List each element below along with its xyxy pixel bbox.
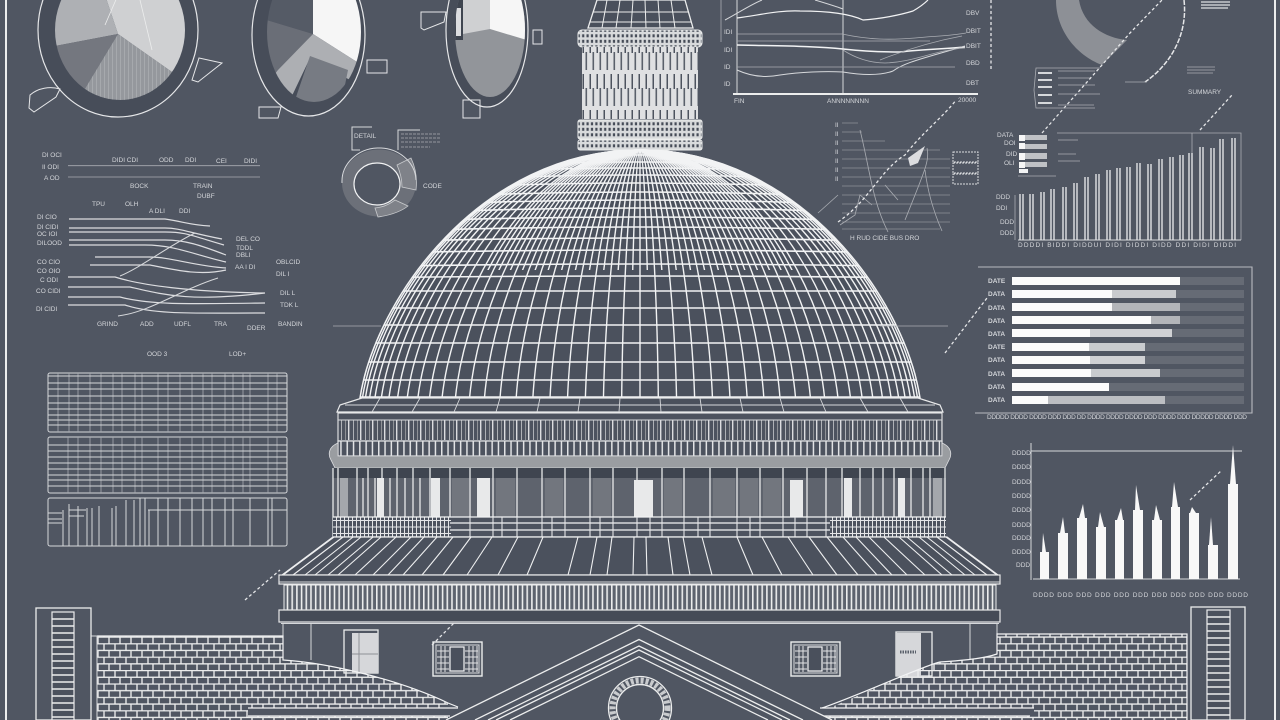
bar chart legend: DID	[1006, 151, 1018, 158]
wall verticals	[283, 623, 997, 660]
y-axis labels: DDDD	[1012, 450, 1031, 457]
small chart labels: H RUD CIDE BUS DRO	[850, 235, 919, 242]
dome side leader lines	[333, 325, 948, 327]
axis labels: DDI	[179, 208, 190, 215]
lower cornice	[279, 610, 1000, 624]
pie one callout left	[29, 88, 60, 112]
table two	[48, 437, 287, 493]
panel: pie chart three	[421, 0, 542, 118]
pie one outer ring	[38, 0, 198, 117]
dotted trend	[1190, 470, 1222, 500]
y-axis labels	[1012, 450, 1031, 569]
bar chart legend: DOI	[1004, 140, 1016, 147]
white segments	[1012, 277, 1180, 404]
pie three callout top	[421, 12, 446, 30]
round window	[608, 676, 672, 720]
line chart labels	[724, 10, 981, 105]
line chart labels: DBIT	[966, 43, 981, 50]
ring highlighted segments	[375, 158, 416, 217]
y-axis labels: DDDD	[1012, 464, 1031, 471]
left small window	[433, 642, 482, 676]
bar chart labels: DDD	[1000, 230, 1014, 237]
small chart labels: II	[835, 140, 839, 147]
flow labels: DIL L	[280, 290, 296, 297]
flow labels: CO CIDI	[36, 288, 61, 295]
small chart labels: II	[835, 122, 839, 129]
bar chart legend: OLI	[1004, 160, 1015, 167]
pie two outer ring	[252, 0, 365, 116]
dotted connector	[1200, 95, 1232, 130]
panel: vertical bars chart	[996, 132, 1241, 249]
x-axis labels: DDDD DDD DDD DDD DDD DDD DDD DDD DDD DDD DDDD	[1033, 592, 1248, 599]
flow labels: CO OIO	[37, 268, 60, 275]
row labels: DATA	[988, 305, 1005, 312]
flow labels: TRA	[214, 321, 228, 328]
pie two label box	[259, 107, 281, 118]
flow labels: DI CIDI	[36, 306, 58, 313]
bar chart labels	[996, 194, 1236, 249]
dotted leader	[945, 298, 987, 353]
panel: top centre line chart	[721, 0, 991, 105]
bars and spikes	[1040, 445, 1238, 579]
small chart gridlines	[842, 123, 950, 229]
panel: left line diagram	[36, 152, 303, 332]
row labels: DATA	[988, 384, 1005, 391]
row labels: DATA	[988, 318, 1005, 325]
flow labels: OBLCID	[276, 259, 301, 266]
upper ledge	[337, 398, 943, 412]
line chart labels: ID	[724, 81, 731, 88]
curved dashed arc	[1145, 0, 1185, 82]
legend list box	[1034, 68, 1100, 108]
small chart labels: II	[835, 167, 839, 174]
panel: left tables	[48, 351, 287, 546]
bar chart labels: DDDDI BIDDI DIDDUI DIDI DIDDI DIDD DDI DIDI DIDDI	[1018, 242, 1236, 249]
small chart curves	[840, 130, 942, 232]
small chart labels: II	[835, 158, 839, 165]
small chart labels: II	[835, 131, 839, 138]
upper colonnade	[338, 413, 942, 441]
flow labels: CO CIO	[37, 259, 60, 266]
flow labels: DDER	[247, 325, 266, 332]
axis labels: OLH	[125, 201, 139, 208]
side panels	[452, 478, 781, 517]
bar chart labels: DDD	[996, 194, 1010, 201]
flow labels: C ODI	[40, 277, 58, 284]
tower lantern cap	[588, 0, 693, 28]
line chart labels: DBD	[966, 60, 980, 67]
pie three outer ring	[446, 0, 528, 107]
columns	[333, 468, 945, 537]
axis labels	[42, 152, 257, 215]
left brick roof	[91, 636, 458, 720]
bar chart legend	[997, 132, 1080, 176]
row labels: DATA	[988, 397, 1005, 404]
small chart labels: II	[835, 149, 839, 156]
grey segments	[1012, 290, 1180, 404]
flow labels: BANDIN	[278, 321, 303, 328]
line chart labels: DBV	[966, 10, 980, 17]
cornice	[279, 575, 1000, 584]
pie one slices	[55, 0, 185, 100]
bars	[1020, 138, 1235, 240]
flow labels	[36, 214, 303, 332]
dashed diagonal	[838, 100, 956, 222]
line chart labels: IDI	[724, 29, 732, 36]
table footnote: DDDDD DDDD DDDD DDD DDD DD DDDD DDDD DDDD DDD DDDD DDD DDDDD DDDD DDD	[987, 414, 1247, 421]
flow labels: AA I DI	[235, 264, 255, 271]
ring body	[342, 150, 416, 216]
right brick roof	[820, 634, 1187, 720]
donut arc	[1056, 0, 1127, 65]
row labels	[988, 278, 1006, 404]
row labels: DATE	[988, 278, 1006, 285]
pie three callout right	[533, 30, 542, 44]
flow labels: UDFL	[174, 321, 191, 328]
row labels: DATA	[988, 357, 1005, 364]
table headers: LOD+	[229, 351, 246, 358]
panel: top right donut	[1034, 0, 1232, 133]
small chart side boxes	[953, 152, 978, 184]
dashed diagonal leader	[1042, 0, 1162, 133]
dome meridians	[362, 150, 918, 398]
axis labels: ODD	[159, 157, 174, 164]
axis labels: DI OCI	[42, 152, 62, 159]
line chart labels: DBIT	[966, 28, 981, 35]
panel: ring chart: DETAIL	[354, 133, 377, 140]
right door	[896, 632, 932, 676]
y-axis labels: DDDD	[1012, 507, 1031, 514]
y-axis labels: DDDD	[1012, 493, 1031, 500]
chart frame	[1015, 133, 1241, 240]
pediment	[446, 625, 832, 720]
line chart labels: 20000	[958, 97, 976, 104]
small chart labels: II	[835, 176, 839, 183]
line chart labels: DBT	[966, 80, 979, 87]
left door	[344, 630, 378, 673]
panel: ring chart: CODE	[423, 183, 442, 190]
axis labels: TRAIN	[193, 183, 213, 190]
table headers: OOD 3	[147, 351, 168, 358]
dome upper extra meridians	[487, 151, 793, 270]
sloped roof	[282, 537, 998, 575]
row labels: DATE	[988, 344, 1006, 351]
panel: pie chart two	[252, 0, 387, 118]
axis labels: A DLI	[149, 208, 165, 215]
axis labels: BOCK	[130, 183, 149, 190]
flow labels: DIL I	[276, 271, 290, 278]
line chart labels: IDI	[724, 47, 732, 54]
flow labels: ADD	[140, 321, 154, 328]
y-axis labels: DDDD	[1012, 535, 1031, 542]
dome surface	[340, 150, 940, 398]
table three	[48, 498, 287, 546]
flow labels: TDDL	[236, 245, 253, 252]
axis labels: DIDI CDI	[112, 157, 138, 164]
balustrade	[338, 441, 942, 456]
row labels: DATA	[988, 331, 1005, 338]
row labels: DATA	[988, 371, 1005, 378]
line chart labels: FIN	[734, 98, 745, 105]
bright windows	[340, 478, 942, 517]
chart axes	[1031, 443, 1242, 580]
pie one callout right	[192, 58, 222, 82]
column storey	[333, 468, 946, 537]
row labels: DATA	[988, 291, 1005, 298]
small chart labels	[835, 122, 919, 242]
panel: ring chart	[342, 127, 442, 217]
axis labels: TPU	[92, 201, 105, 208]
bar chart legend: DATA	[997, 132, 1014, 139]
axis labels: CEI	[216, 158, 227, 165]
flow labels: GRIND	[97, 321, 118, 328]
dashed leader	[245, 570, 455, 645]
line chart curves	[737, 0, 928, 20]
flow curves	[68, 219, 265, 313]
pie two callout	[367, 60, 387, 73]
pie three slices	[455, 0, 525, 97]
dark tracks	[1012, 277, 1244, 404]
flow labels: TDK L	[280, 302, 299, 309]
frieze	[284, 585, 996, 610]
table frame	[975, 267, 1252, 413]
flow labels: DEL CO	[236, 236, 260, 243]
entablature band	[329, 443, 951, 468]
table headers	[147, 351, 246, 358]
flow labels: OC IOI	[37, 231, 57, 238]
axis labels: DIDI	[244, 158, 257, 165]
y-axis labels: DDDD	[1012, 522, 1031, 529]
tower drum	[582, 47, 698, 119]
axis lines	[68, 166, 260, 177]
y-axis labels: DDD	[1016, 562, 1030, 569]
flow labels: DI CIDI	[37, 224, 58, 231]
flow labels: DBLI	[236, 252, 251, 259]
right small window	[791, 642, 840, 676]
donut notes: SUMMARY	[1188, 89, 1222, 96]
line chart labels: ID	[724, 64, 731, 71]
panel: left chimney	[36, 608, 91, 720]
axis labels: A OD	[44, 175, 60, 182]
tower base band	[578, 120, 702, 150]
panel: pie chart one	[29, 0, 222, 117]
panel: right chimney	[1191, 607, 1245, 720]
flow labels: DILOOD	[37, 240, 62, 247]
donut notes	[1125, 2, 1230, 96]
line chart labels: ANNNNNNNN	[827, 98, 869, 105]
axis labels: DUBF	[197, 193, 215, 200]
axis labels: DDI	[185, 157, 196, 164]
y-axis labels: DDDD	[1012, 479, 1031, 486]
pie two slices	[267, 0, 361, 102]
bar chart labels: DDD	[1000, 219, 1014, 226]
axis labels: II ODI	[42, 164, 59, 171]
bar chart labels: DDI	[996, 205, 1007, 212]
dome latitudes	[340, 155, 940, 397]
lower grid course	[333, 517, 946, 537]
panel: centre small chart	[818, 100, 978, 242]
table one	[48, 373, 287, 432]
line chart axes	[737, 0, 843, 94]
tower upper ring	[578, 30, 702, 47]
small chart highlight	[908, 146, 925, 166]
flow labels: DI CIO	[37, 214, 57, 221]
panel: horizontal bar table	[945, 267, 1252, 421]
panel: lower right bar chart	[1012, 443, 1248, 599]
y-axis labels: DDDD	[1012, 549, 1031, 556]
pie three callout bottom	[463, 100, 480, 118]
ring callouts	[352, 127, 372, 150]
